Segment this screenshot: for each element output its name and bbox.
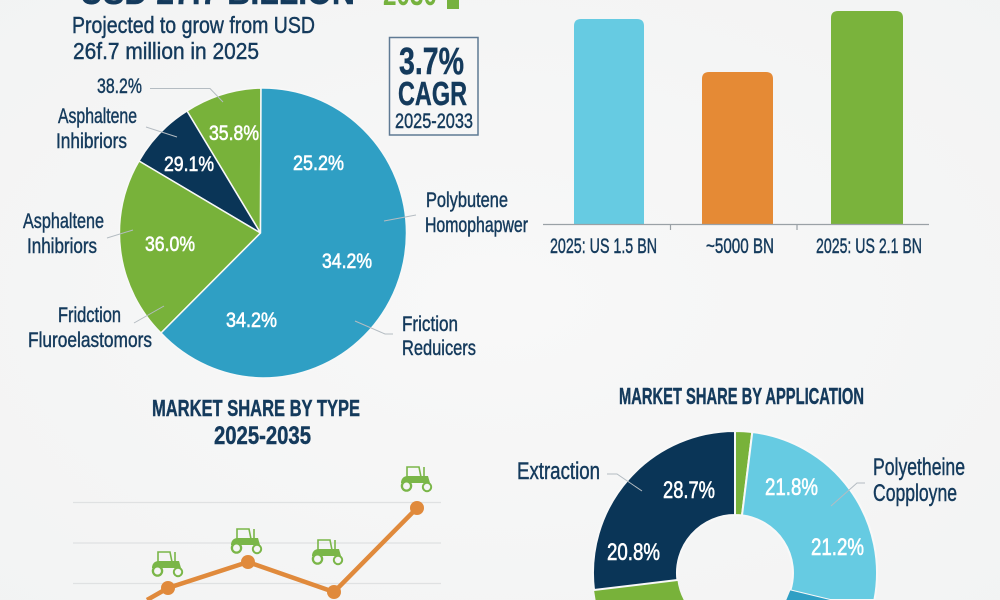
- heading: market share by type: MARKET SHARE BY TYPE: [152, 395, 360, 421]
- subtitle: projected growth: [72, 12, 315, 64]
- donut leader lines and category labels: Polyetheine: [873, 454, 965, 481]
- donut percentage labels: 21.8%: [765, 474, 818, 501]
- donut leader lines and category labels: [517, 454, 965, 507]
- pie leader lines and category labels: Friction: [402, 313, 458, 336]
- pie percentage labels: [145, 122, 372, 332]
- bar axis labels: 2025: US 2.1 BN: [816, 235, 922, 258]
- pie percentage labels: 25.2%: [293, 152, 344, 175]
- pie leader lines and category labels: 38.2%: [97, 75, 142, 98]
- bar axis labels: 2025: US 1.5 BN: [550, 235, 657, 258]
- icon: tractor 4: [401, 467, 431, 491]
- bar axis labels: [550, 235, 922, 258]
- donut segment: teal: [786, 590, 830, 600]
- donut segment: small green: [735, 431, 752, 515]
- donut percentage labels: 28.7%: [663, 477, 715, 504]
- heading: market share by type: [152, 395, 360, 450]
- bar: 5000 BN: [702, 72, 773, 224]
- pie percentage labels: 34.2%: [226, 309, 277, 332]
- icon: tractor 3: [312, 540, 342, 564]
- pie percentage labels: 34.2%: [322, 250, 372, 273]
- pie percentage labels: 36.0%: [145, 233, 195, 256]
- icon: tractor 1: [152, 552, 182, 576]
- bar axis labels: ~5000 BN: [706, 235, 774, 258]
- pie leader lines and category labels: Homophapwer: [425, 214, 528, 237]
- donut leader lines and category labels: Copployne: [873, 480, 957, 507]
- pie leader lines and category labels: Reduicers: [402, 337, 476, 360]
- donut chart: market share by application: [593, 431, 877, 600]
- bar: 2025 US 1.5 BN: [574, 19, 644, 224]
- line chart: trend with tractor icons: [73, 467, 441, 600]
- pie leader lines and category labels: Polybutene: [426, 189, 508, 212]
- heading: market share by application: MARKET SHARE BY APPLICATION: [619, 383, 864, 409]
- pie leader lines and category labels: [23, 75, 528, 360]
- callout: CAGR box: 2025-2033: [395, 110, 473, 133]
- donut segment: navy: [593, 431, 735, 590]
- donut percentage labels: 21.2%: [811, 534, 864, 561]
- donut segment: light blue: [742, 432, 877, 600]
- pie leader lines and category labels: Fluroelastomors: [28, 329, 152, 352]
- heading: market share by type: 2025-2035: [214, 422, 311, 450]
- donut percentage labels: 20.8%: [607, 539, 660, 566]
- pie slice: navy: [139, 111, 260, 233]
- pie leader lines and category labels: Inhibriors: [56, 130, 127, 153]
- pie slice: large blue: [161, 88, 406, 378]
- donut segment: lower green: [594, 580, 684, 600]
- subtitle: projected growth: Projected to grow from USD: [72, 12, 315, 38]
- callout: CAGR box: 3.7%: [399, 41, 464, 83]
- subtitle: projected growth: 26f.7 million in 2025: [73, 38, 259, 64]
- pie leader lines and category labels: Inhibriors: [27, 235, 97, 258]
- bar chart: market value: [543, 11, 929, 258]
- icon: tractor 2: [231, 529, 261, 553]
- pie slice: left green: [119, 161, 260, 333]
- donut leader lines and category labels: Extraction: [517, 458, 600, 485]
- pie leader lines and category labels: Asphaltene: [58, 105, 137, 128]
- pie leader lines and category labels: Asphaltene: [23, 210, 104, 233]
- donut percentage labels: [607, 474, 864, 566]
- callout: CAGR box: CAGR: [398, 75, 467, 112]
- pie percentage labels: 35.8%: [209, 122, 259, 145]
- pie percentage labels: 29.1%: [164, 153, 214, 176]
- bar: 2025 US 2.1 BN: [831, 11, 903, 224]
- pie chart: market share by type: [119, 88, 406, 378]
- pie leader lines and category labels: Fridction: [58, 304, 121, 327]
- callout: CAGR box: [390, 38, 478, 135]
- pie slice: top green: [187, 88, 261, 233]
